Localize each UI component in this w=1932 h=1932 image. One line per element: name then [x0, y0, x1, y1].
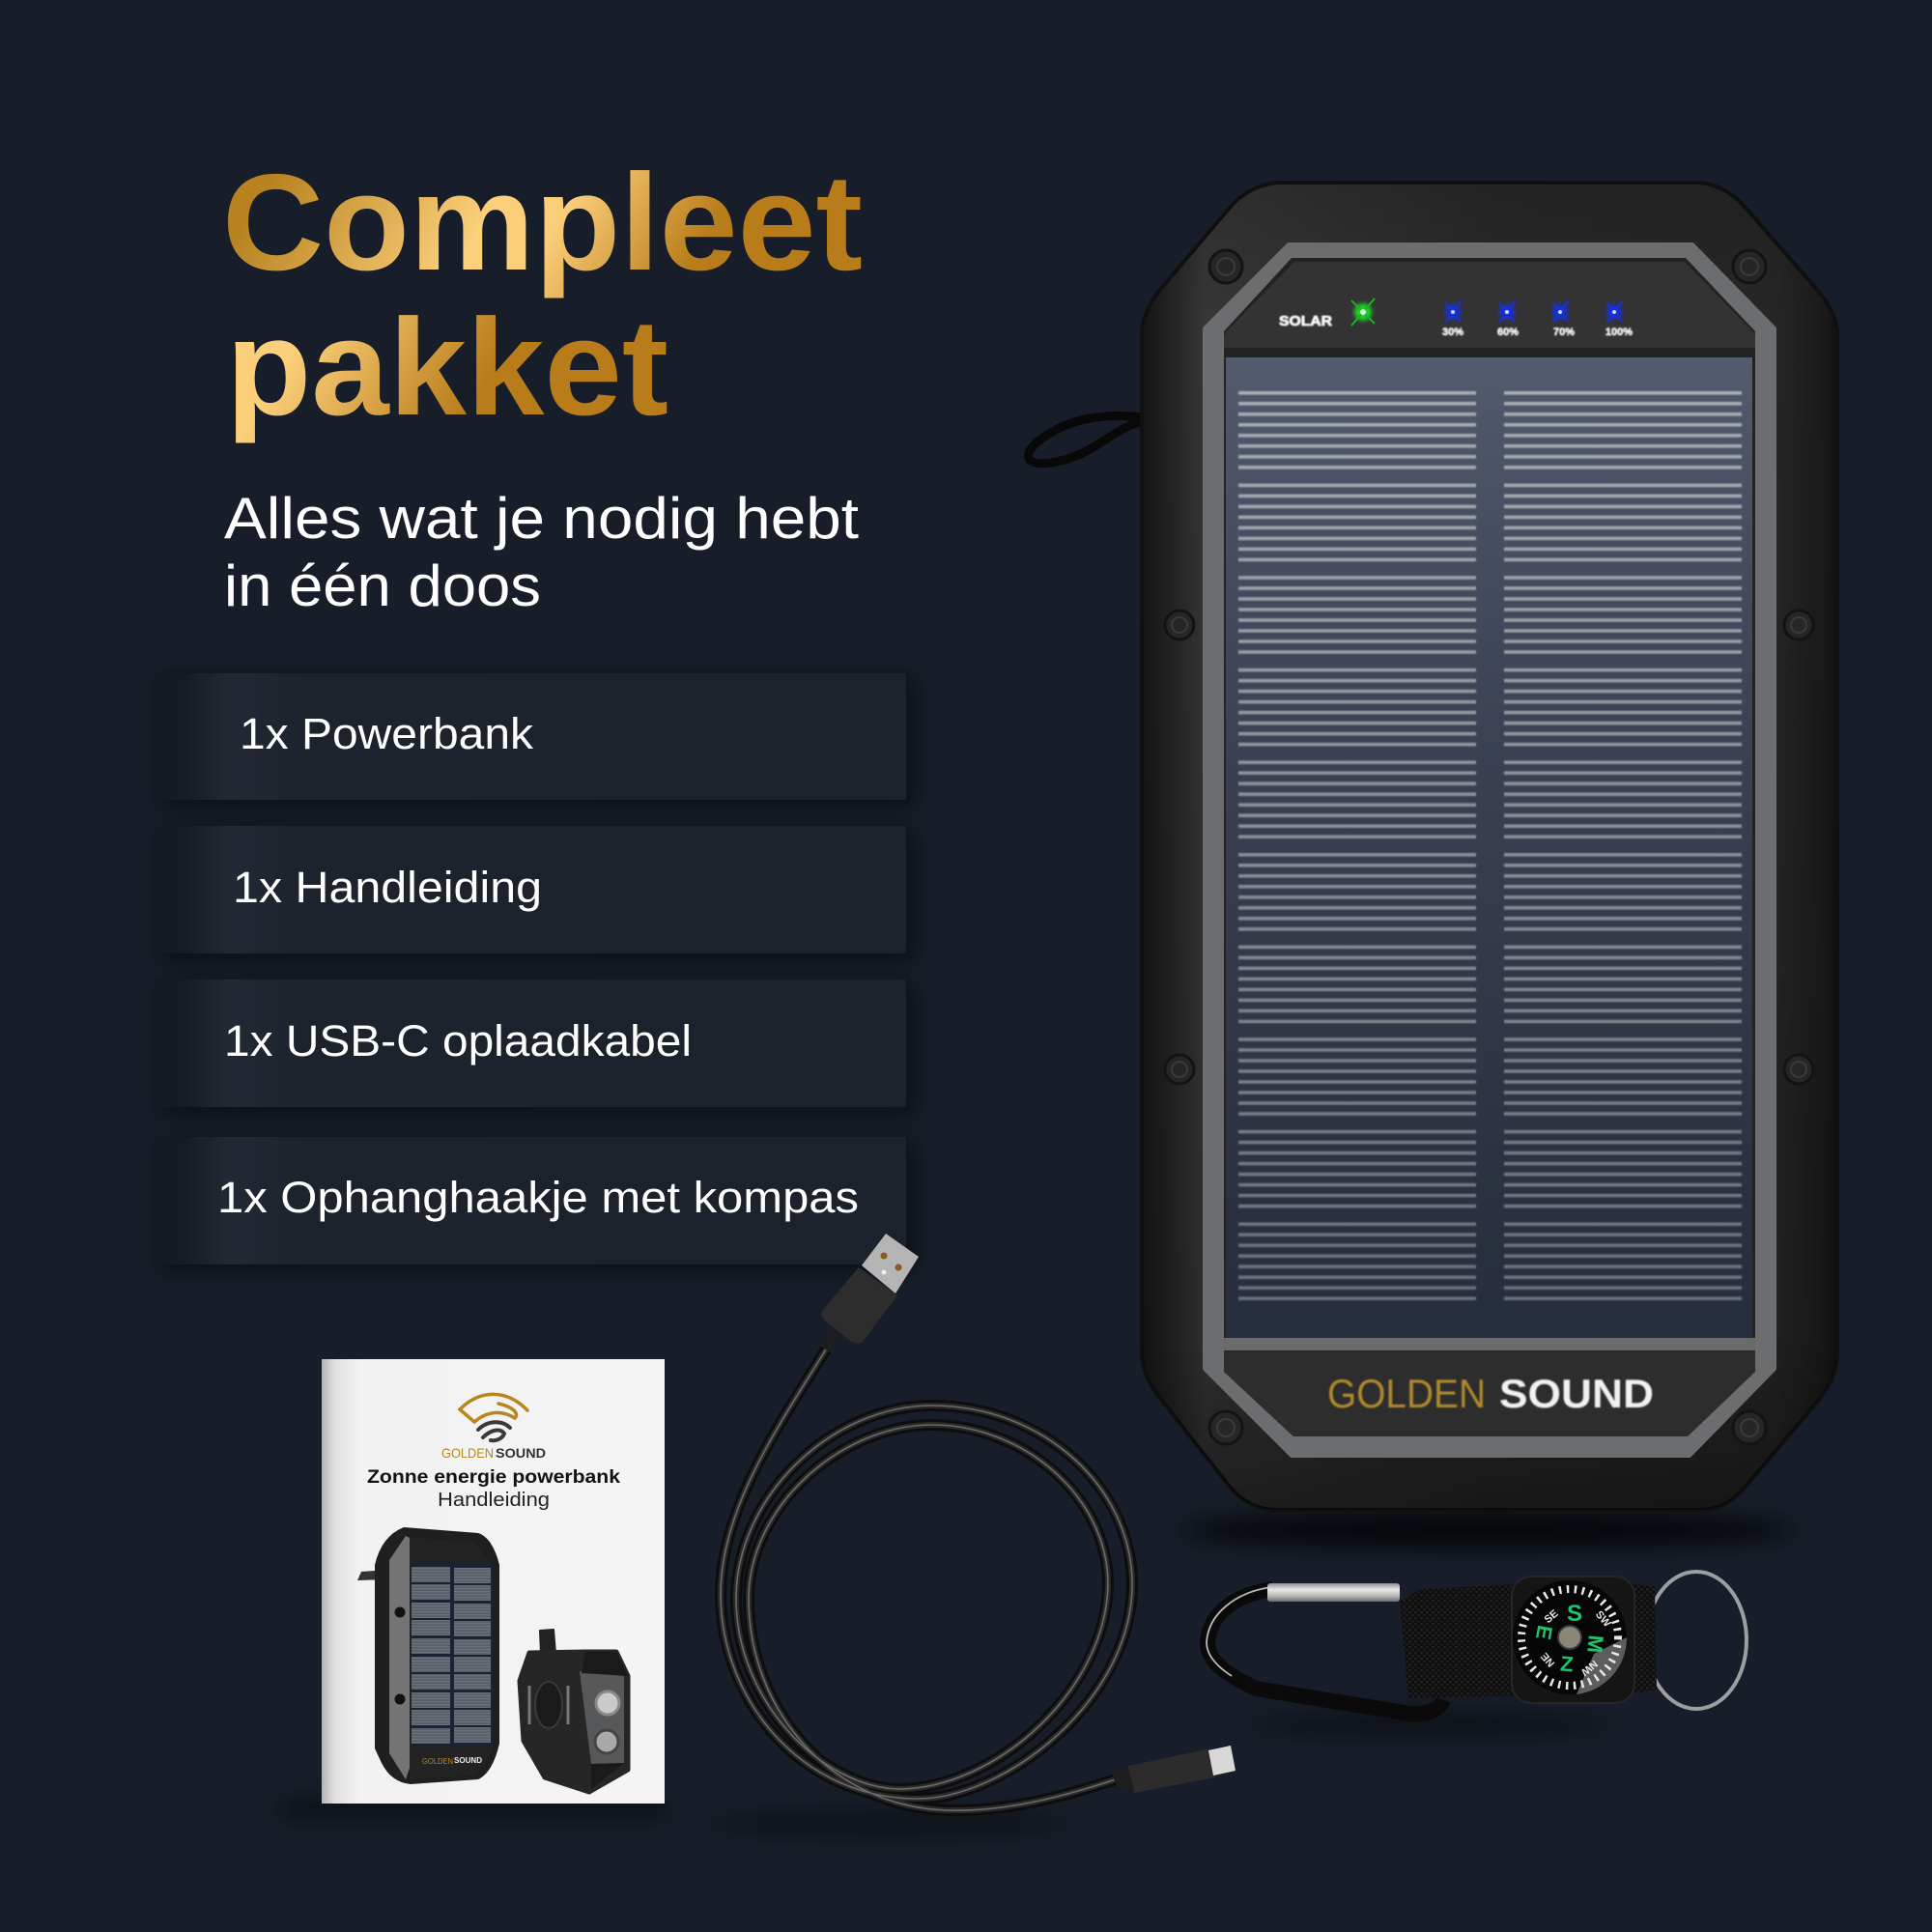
icon: USB-C cable	[721, 1234, 1236, 1810]
logo wordmark: GOLDEN	[441, 1445, 494, 1461]
logo wordmark: SOUND	[496, 1445, 546, 1461]
icon: powerbank	[1028, 183, 1837, 1510]
icon: Golden Sound logo	[460, 1394, 527, 1440]
subtitle: Alles wat je nodig hebt	[224, 486, 859, 551]
compass dial: M	[1582, 1634, 1608, 1654]
inner recess	[1224, 258, 1755, 1436]
carabiner shadow	[1246, 1715, 1613, 1734]
compass dial: NE	[1539, 1650, 1557, 1669]
panel: contents list	[155, 673, 916, 1274]
LED percent labels: 70%	[1553, 327, 1575, 338]
brand panel	[1224, 1351, 1755, 1436]
compass dial: NW	[1578, 1658, 1600, 1678]
cable shadow	[705, 1815, 1072, 1833]
body shading	[1142, 183, 1837, 1510]
cable highlight	[721, 1350, 1132, 1810]
panel shadows	[160, 676, 916, 1274]
title: Compleet pakket: pakket	[226, 291, 668, 444]
USB-A connector	[822, 1234, 919, 1351]
LED percent labels: 100%	[1605, 327, 1633, 338]
row: 1x Ophanghaakje met kompas	[155, 1137, 906, 1264]
icon: carabiner with compass	[1207, 1572, 1747, 1714]
LED percent labels	[1442, 327, 1633, 338]
manual subheading: Handleiding	[438, 1490, 550, 1511]
key ring	[1646, 1572, 1747, 1709]
title: Compleet pakket	[222, 146, 863, 444]
title: Compleet pakket: Compleet	[222, 146, 863, 299]
logo wordmark	[441, 1445, 546, 1461]
SOLAR label: SOLAR	[1279, 313, 1332, 329]
subtitle: in één doos	[224, 554, 541, 618]
lanyard loop	[1028, 415, 1142, 464]
manual heading: Zonne energie powerbank	[367, 1466, 620, 1488]
row: 1x Powerbank: 1x Powerbank	[240, 709, 534, 758]
row: 1x USB-C oplaadkabel: 1x USB-C oplaadkabel	[224, 1016, 692, 1065]
compass dial: S	[1567, 1601, 1582, 1627]
grey bar	[1224, 1338, 1755, 1350]
compass housing	[1512, 1577, 1634, 1703]
subtitle	[224, 486, 859, 618]
brand name	[1327, 1371, 1654, 1416]
row: 1x USB-C oplaadkabel	[155, 980, 906, 1107]
LED percent labels: 30%	[1442, 327, 1463, 338]
compass dial: SE	[1543, 1607, 1561, 1626]
silver tube	[1267, 1583, 1400, 1602]
screws	[1165, 250, 1813, 1444]
brand name: SOUND	[1499, 1371, 1654, 1416]
icon: mini powerbank front	[357, 1527, 499, 1784]
solar panel	[1226, 357, 1752, 1338]
USB-C connector	[1112, 1746, 1236, 1793]
row: 1x Handleiding: 1x Handleiding	[233, 863, 542, 912]
LED panel	[1224, 262, 1755, 348]
icon: mini powerbank back	[520, 1630, 628, 1792]
nylon strap	[1400, 1584, 1517, 1698]
compass dial	[1513, 1580, 1627, 1694]
compass dial: E	[1531, 1624, 1557, 1641]
grey frame	[1205, 244, 1775, 1456]
manual booklet	[322, 1359, 665, 1804]
rugged outer body	[1142, 183, 1837, 1510]
compass dial: Z	[1559, 1651, 1575, 1677]
LED percent labels: 60%	[1497, 327, 1519, 338]
compass dial: SW	[1593, 1608, 1613, 1630]
row: 1x Ophanghaakje met kompas: 1x Ophanghaakje met kompas	[217, 1173, 859, 1222]
icon: mini powerbank front: GOLDEN	[422, 1756, 453, 1766]
icon: green LED	[1351, 298, 1375, 326]
powerbank shadow	[1179, 1513, 1797, 1548]
row: 1x Handleiding	[155, 826, 906, 953]
brand name: GOLDEN	[1327, 1371, 1486, 1416]
icon: blue LEDs	[1445, 300, 1623, 323]
row: 1x Powerbank	[155, 673, 906, 800]
cable coil	[721, 1350, 1132, 1810]
icon: mini powerbank front: SOUND	[454, 1755, 482, 1765]
carabiner hook	[1208, 1589, 1443, 1714]
booklet shadow	[280, 1803, 667, 1816]
